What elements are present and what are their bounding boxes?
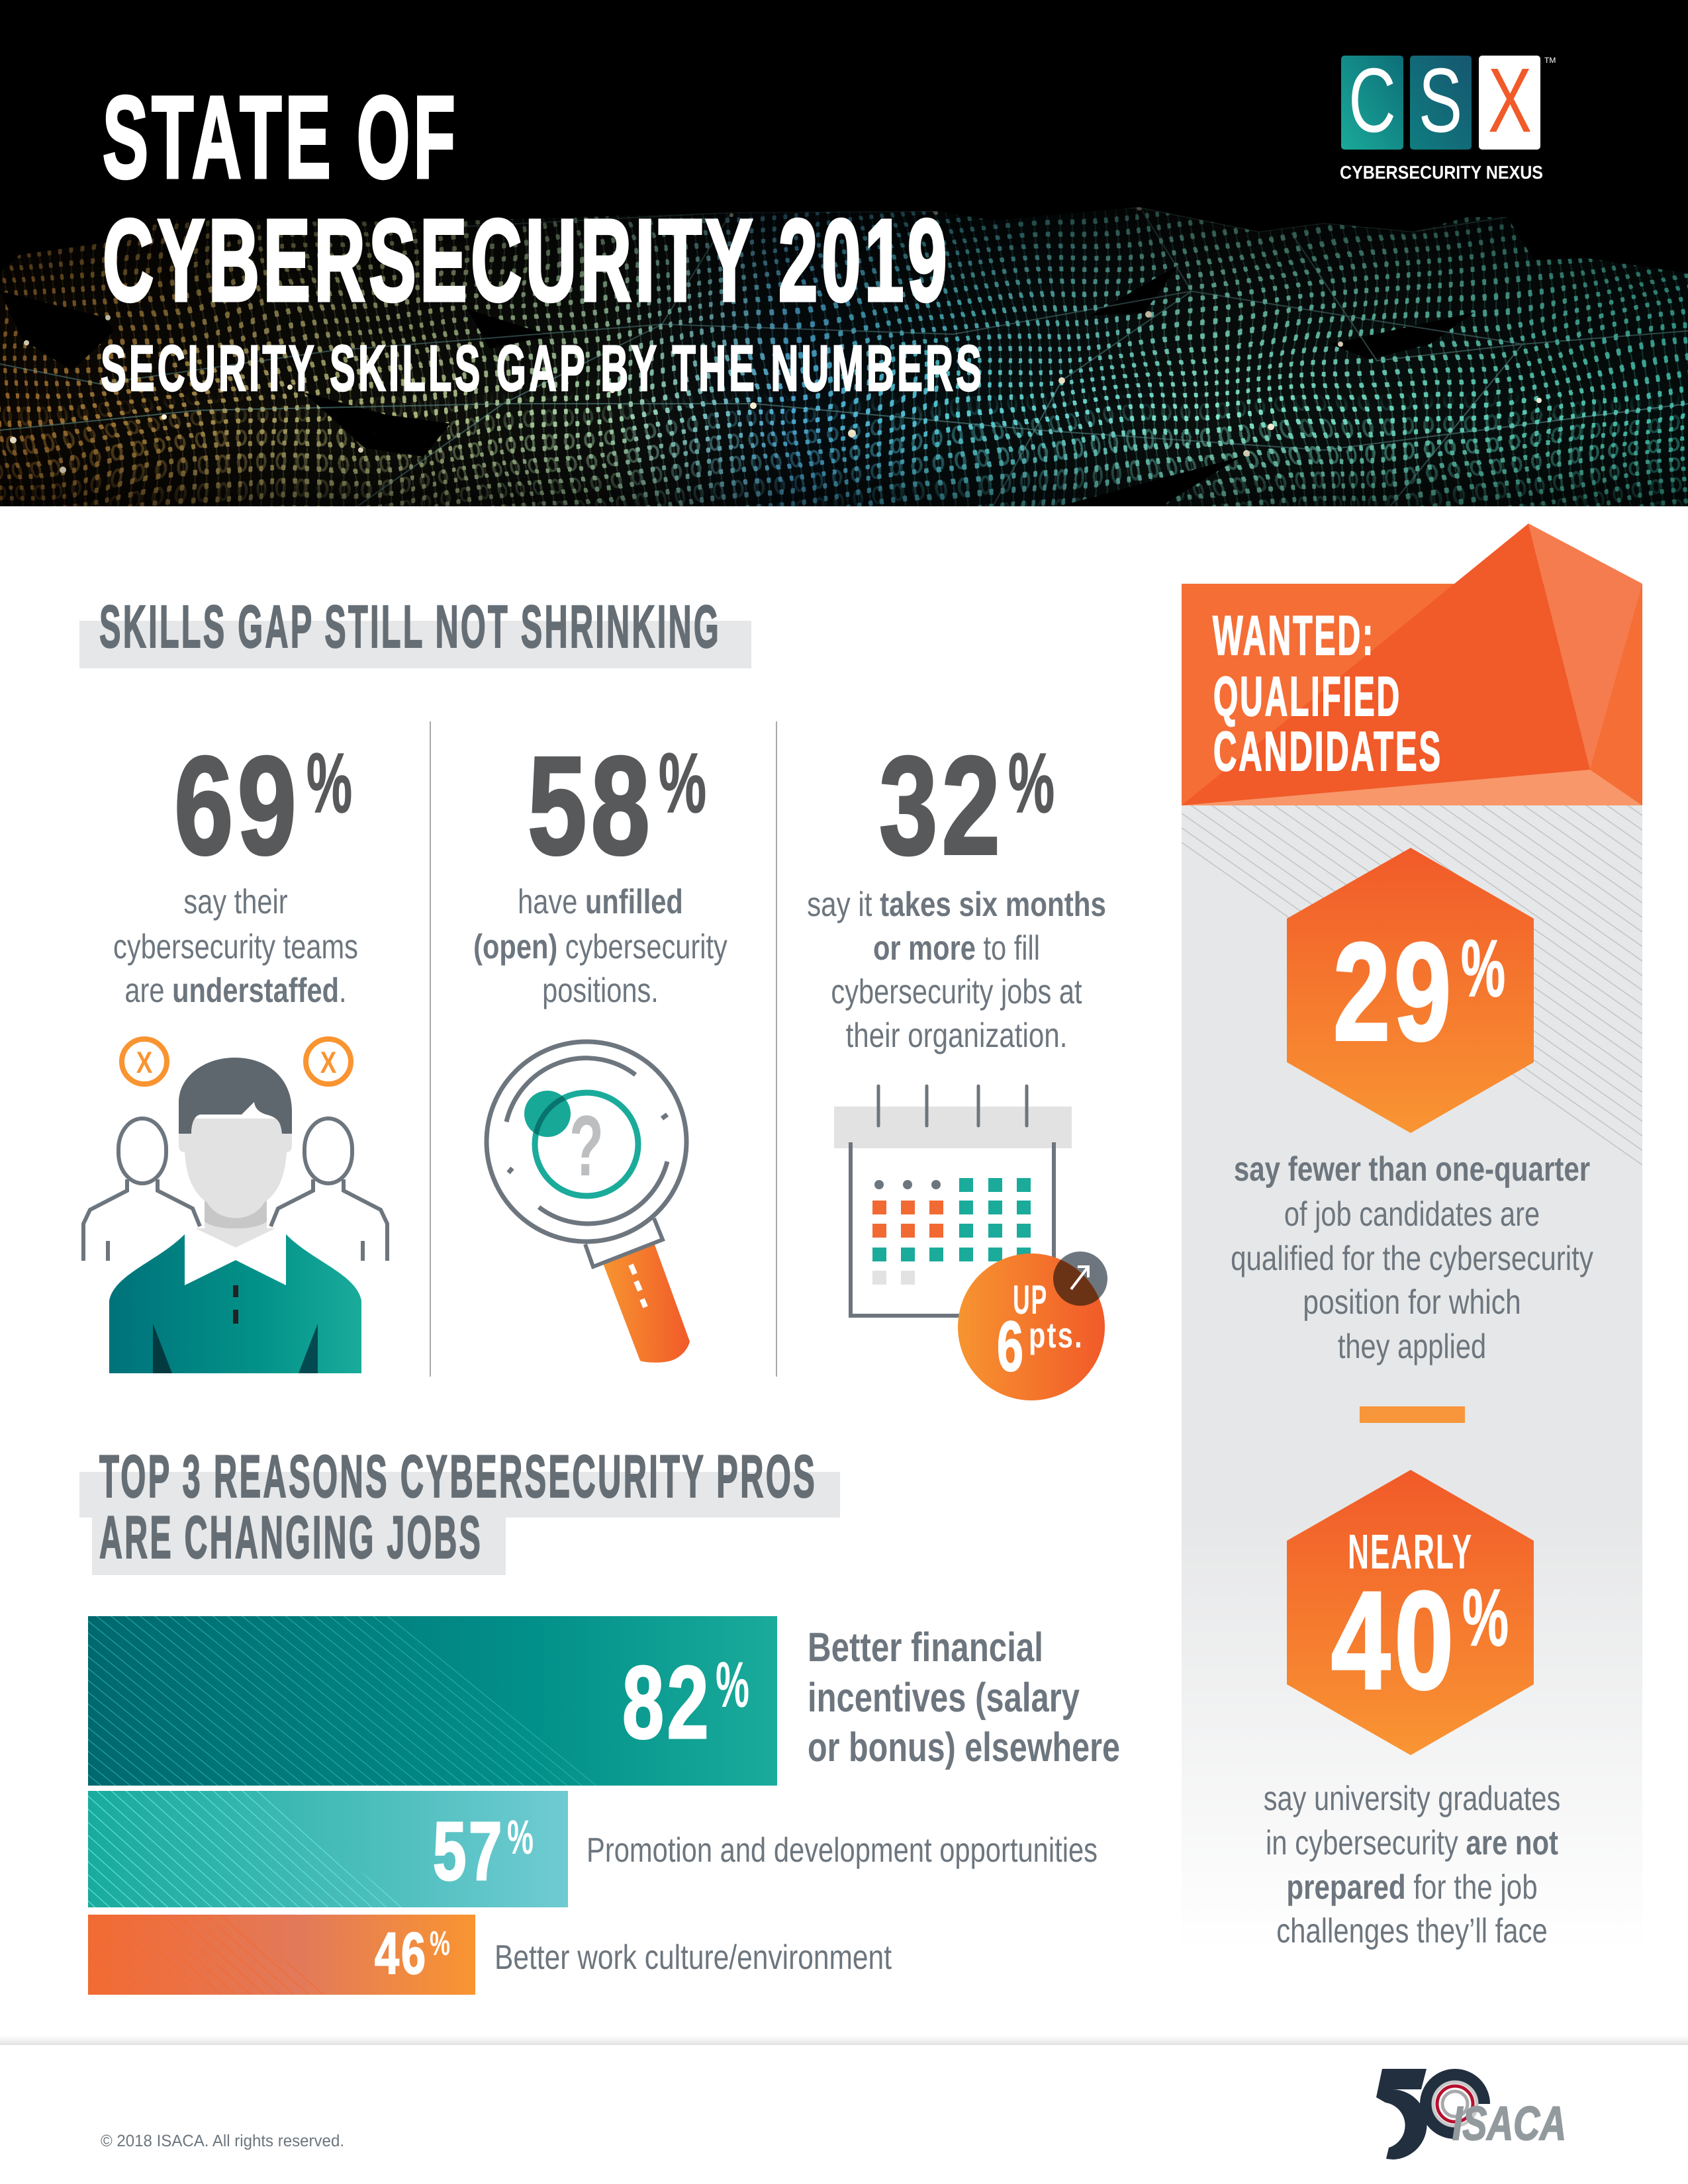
- bar: 46 percent: [88, 1915, 475, 1995]
- footer: [0, 2036, 1688, 2160]
- bar: 46 percent: 46: [375, 1920, 428, 1986]
- binary mesh landscape: [0, 199, 1688, 506]
- stat column 1: understaffed: are understaffed.: [124, 972, 347, 1010]
- stat column 3: six months: [807, 727, 1106, 1055]
- panel background: [1182, 805, 1642, 1952]
- bar: 57 percent: [88, 1791, 568, 1907]
- bar: 82 percent: [88, 1616, 777, 1786]
- stat column 2: unfilled positions: have unfilled: [518, 883, 683, 921]
- title: [103, 73, 951, 326]
- icon: understaffed team: [83, 1039, 387, 1373]
- hexagon: 29 percent: [1287, 848, 1534, 1133]
- text: fewer than one-quarter: position for which: [1303, 1283, 1521, 1322]
- text: fewer than one-quarter: they applied: [1338, 1328, 1486, 1366]
- icon: calendar: 6: [997, 1306, 1023, 1386]
- stat column 1: understaffed: 69: [174, 727, 301, 884]
- icon: magnifying glass: [487, 1042, 690, 1363]
- label: financial incentives: incentives (salary: [808, 1675, 1080, 1721]
- heading: top 3 reasons: [79, 1443, 840, 1575]
- stat column 1: understaffed: say their: [183, 883, 288, 921]
- hexagon: nearly 40 percent: NEARLY: [1348, 1524, 1473, 1579]
- text: fewer than one-quarter: [1231, 1150, 1593, 1366]
- bar: 82 percent: %: [716, 1648, 749, 1721]
- stat column 1: understaffed: cybersecurity teams: [113, 928, 358, 966]
- banner: WANTED:: [1213, 604, 1375, 666]
- text: fewer than one-quarter: say fewer than one-quarter: [1234, 1150, 1590, 1189]
- heading: top 3 reasons: ARE CHANGING JOBS: [99, 1504, 483, 1571]
- icon: missing-person marks: [122, 1039, 351, 1084]
- stat column 3: six months: %: [1008, 736, 1055, 831]
- stat column 1: understaffed: [113, 727, 358, 1010]
- heading: skills gap: SKILLS GAP STILL NOT SHRINKING: [99, 594, 721, 660]
- CSX logo: CYBERSECURITY NEXUS: [1340, 162, 1543, 183]
- icon: magnifying glass: ?: [569, 1097, 604, 1194]
- hexagon: 29 percent: 29: [1333, 914, 1455, 1069]
- banner: QUALIFIED: [1213, 665, 1401, 727]
- panel: wanted: [1182, 523, 1642, 1952]
- CSX logo: TM: [1544, 56, 1556, 65]
- text: not prepared: in cybersecurity are not: [1266, 1824, 1558, 1862]
- label: financial incentives: [808, 1625, 1120, 1770]
- hexagon: 29 percent: %: [1461, 923, 1505, 1013]
- CSX logo: S: [1419, 50, 1462, 152]
- stat column 2: unfilled positions: (open) cybersecurity: [473, 928, 727, 966]
- banner: [1182, 523, 1642, 805]
- icon: missing-person marks: X: [136, 1045, 153, 1079]
- hexagon: nearly 40 percent: [1287, 1470, 1534, 1755]
- bar: 57 percent: 57: [433, 1805, 504, 1897]
- logo: ISACA 50: ISACA: [1452, 2097, 1566, 2150]
- label: promotion: Promotion and development opportunities: [586, 1831, 1098, 1870]
- label: financial incentives: or bonus) elsewhere: [808, 1725, 1120, 1770]
- stat column 1: understaffed: %: [306, 736, 352, 831]
- icon: calendar: [834, 1086, 1107, 1400]
- stat column 3: six months: cybersecurity jobs at: [831, 973, 1082, 1011]
- stat column 3: six months: their organization.: [846, 1017, 1067, 1055]
- bar: 57 percent: %: [507, 1811, 534, 1864]
- text: not prepared: say university graduates: [1264, 1780, 1560, 1818]
- stat column 3: six months: or more to fill: [873, 929, 1040, 968]
- copyright: © 2018 ISACA. All rights reserved.: [101, 2132, 344, 2150]
- text: not prepared: challenges they’ll face: [1276, 1912, 1548, 1950]
- hexagon: nearly 40 percent: %: [1462, 1572, 1509, 1662]
- stat column 2: unfilled positions: [473, 727, 727, 1010]
- label: work culture: Better work culture/environment: [494, 1938, 892, 1977]
- bar: 82 percent: 82: [622, 1645, 712, 1760]
- bar: 46 percent: %: [430, 1925, 450, 1963]
- CSX logo: [1340, 50, 1556, 183]
- title: STATE OF: [103, 73, 459, 203]
- logo: ISACA 50: [1376, 2069, 1566, 2160]
- stat column 2: unfilled positions: %: [659, 736, 706, 831]
- header banner: [0, 0, 1688, 506]
- heading: skills gap: [79, 594, 751, 668]
- icon: calendar: pts.: [1029, 1316, 1084, 1355]
- icon: missing-person marks: X: [320, 1045, 337, 1079]
- banner: CANDIDATES: [1213, 720, 1442, 782]
- stat column 3: six months: 32: [879, 727, 1004, 884]
- label: financial incentives: Better financial: [808, 1625, 1043, 1670]
- stat column 3: six months: say it takes six months: [807, 886, 1106, 924]
- text: fewer than one-quarter: qualified for the cybersecurity: [1231, 1240, 1593, 1278]
- stat column 2: unfilled positions: 58: [528, 727, 654, 884]
- hexagon: nearly 40 percent: 40: [1331, 1563, 1458, 1718]
- subtitle: SECURITY SKILLS GAP BY THE NUMBERS: [101, 332, 984, 404]
- title: CYBERSECURITY 2019: [103, 196, 951, 326]
- divider lines: [430, 721, 776, 1377]
- icon: calendar: UP: [1013, 1277, 1048, 1323]
- CSX logo: X: [1488, 50, 1532, 152]
- heading: top 3 reasons: TOP 3 REASONS CYBERSECURITY PROS: [99, 1443, 817, 1510]
- text: not prepared: prepared for the job: [1286, 1868, 1538, 1907]
- stat column 2: unfilled positions: positions.: [542, 972, 659, 1010]
- CSX logo: C: [1348, 50, 1396, 152]
- text: not prepared: [1264, 1780, 1560, 1950]
- text: fewer than one-quarter: of job candidates are: [1284, 1195, 1540, 1234]
